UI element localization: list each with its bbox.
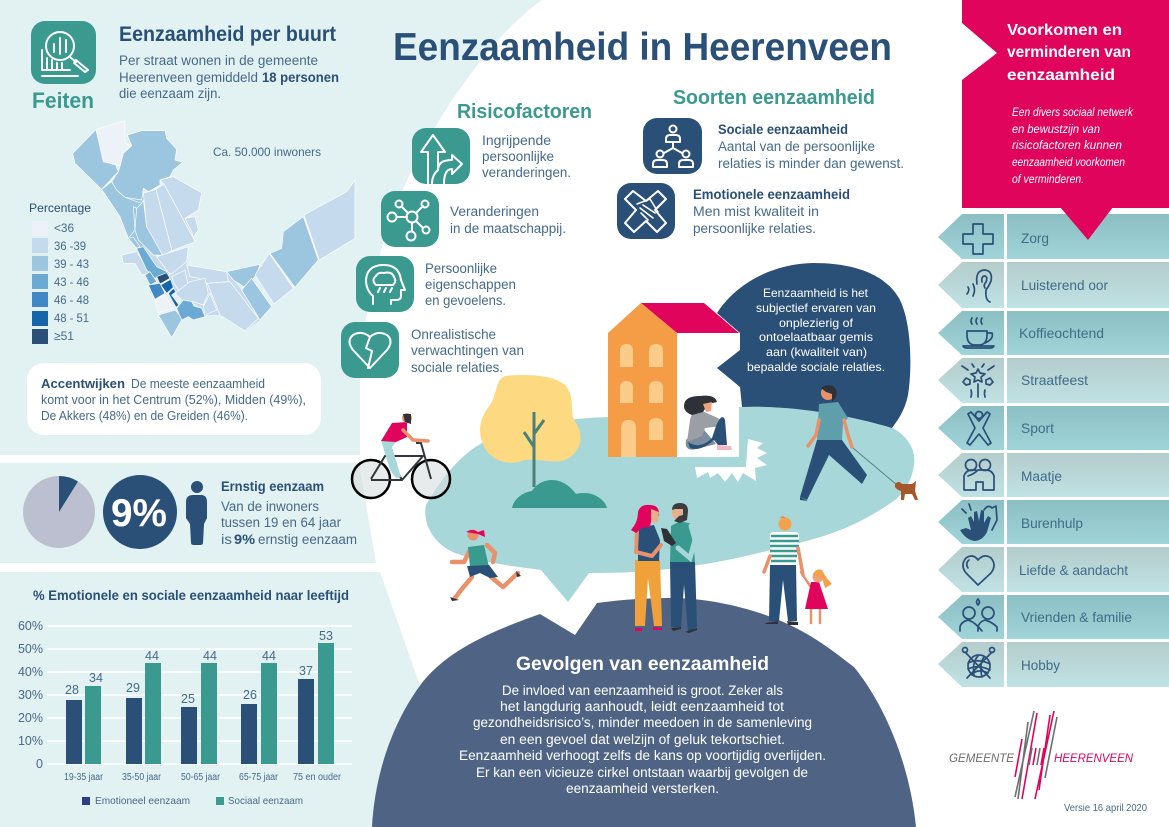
illustration: house [608, 303, 739, 457]
text: per buurt intro: 18 personen [262, 70, 339, 85]
bar chart: emotional and social loneliness by age: 44 [145, 649, 159, 663]
panel: prevention header: Voorkomen en [1007, 22, 1122, 39]
panel: prevention header: risicofactoren kunnen [1012, 138, 1122, 152]
bar chart: emotional and social loneliness by age: 34 [89, 671, 103, 685]
row: Burenhulp: Burenhulp [1021, 515, 1083, 531]
type: emotional loneliness: Men mist kwaliteit in [693, 204, 819, 219]
chart legend [82, 795, 303, 807]
risk factor 1: Ingrijpende [482, 133, 551, 148]
text: Ernstig eenzaam [221, 479, 357, 547]
risk factor 2: in de maatschappij. [450, 221, 566, 236]
callout: Accentwijken [27, 363, 321, 435]
icon: Feiten magnifier [31, 21, 96, 84]
row: Liefde en aandacht [938, 547, 1169, 592]
row: Maatje [938, 453, 1169, 497]
risk factor 2: Veranderingen [450, 204, 539, 219]
speech bubble: definition: bepaalde sociale relaties. [747, 360, 885, 374]
dome: Gevolgen van eenzaamheid: Er kan een vicieuze cirkel ontstaan waarbij gevolgen de [476, 765, 808, 780]
row: Straatfeest [938, 358, 1169, 403]
text: Ernstig eenzaam: tussen 19 en 64 jaar [221, 515, 341, 530]
bar chart: emotional and social loneliness by age: 0 [36, 757, 43, 771]
panel: facts background [0, 0, 542, 455]
bar chart: emotional and social loneliness by age: 75 en ouder [293, 772, 342, 783]
speech bubble: definition [717, 263, 910, 428]
text: per buurt intro [119, 53, 339, 101]
pie chart: 9 percent [23, 476, 95, 548]
risk factor 4: verwachtingen van [411, 343, 524, 358]
callout: Accentwijken: De meeste eenzaamheid [131, 377, 265, 391]
bar chart: emotional and social loneliness by age: 65-75 jaar [239, 772, 279, 783]
bar chart: emotional and social loneliness by age: 28 [65, 683, 79, 697]
row: Maatje: Maatje [1021, 468, 1062, 484]
text: per buurt intro: Heerenveen gemiddeld [119, 70, 258, 85]
badge: 9% [103, 475, 177, 549]
text: per buurt intro: Per straat wonen in de gemeente [119, 53, 318, 68]
bar chart: emotional and social loneliness by age [18, 588, 352, 807]
heading: per buurt: Eenzaamheid per buurt [119, 23, 336, 46]
risk factor 3 [356, 256, 516, 312]
type: social loneliness: relaties is minder dan gewenst. [718, 156, 904, 171]
heading: Risicofactoren: Risicofactoren [457, 101, 592, 123]
row: Sport [938, 406, 1169, 450]
bar chart: emotional and social loneliness by age: 10% [18, 734, 43, 748]
dome: Gevolgen van eenzaamheid: Eenzaamheid verhoogt zelfs de kans op voortijdig overlijden. [459, 748, 826, 763]
risk factor 1 [412, 128, 571, 184]
row: Koffieochtend: Koffieochtend [1019, 325, 1104, 341]
row: Hobby: Hobby [1021, 657, 1060, 673]
illustration: white house side [677, 333, 739, 457]
text: Ernstig eenzaam: 9% [234, 532, 255, 547]
text: Ernstig eenzaam: ernstig eenzaam [258, 532, 357, 547]
row: Zorg [938, 214, 1169, 259]
heading: Soorten eenzaamheid: Soorten eenzaamheid [673, 87, 875, 109]
chart title: % Emotionele en sociale eenzaamheid naar leeftijd [33, 588, 349, 603]
type: emotional loneliness: persoonlijke relaties. [693, 221, 816, 236]
speech bubble: definition: onplezierig of [779, 316, 854, 330]
bar chart: emotional and social loneliness by age: 35-50 jaar [122, 772, 162, 783]
type: social loneliness: Sociale eenzaamheid [718, 122, 848, 137]
logo: Gemeente Heerenveen [949, 711, 1133, 799]
panel: prevention header: en bewustzijn van [1012, 122, 1100, 136]
bar chart: emotional and social loneliness by age: 20% [18, 711, 43, 725]
bar chart: emotional and social loneliness by age: 44 [262, 649, 276, 663]
illustration: father and child [764, 516, 832, 625]
legend: percentage: 39 - 43 [54, 257, 89, 271]
bar chart: emotional and social loneliness by age: 40% [18, 665, 43, 679]
legend: percentage: 43 - 46 [54, 275, 89, 289]
speech bubble: definition: ontoelaatbaar gemis [759, 330, 873, 344]
map of Heerenveen neighbourhoods [73, 121, 355, 338]
pink pointer over first row [1060, 207, 1113, 240]
row: Koffieochtend [938, 311, 1169, 355]
dome: Gevolgen van eenzaamheid: gezondheidsrisico’s, minder meedoen in de samenleving [473, 715, 812, 730]
callout: Accentwijken: komt voor in het Centrum (52%), Midden (49%), [41, 393, 306, 407]
row: Vrienden en familie: Vrienden & familie [1021, 609, 1132, 625]
bar chart: emotional and social loneliness by age: 37 [299, 664, 313, 678]
dome: Gevolgen van eenzaamheid: De invloed van eenzaamheid is groot. Zeker als [502, 683, 783, 698]
panel: chart background [0, 572, 425, 827]
row: Burenhulp [938, 500, 1169, 544]
icon: dog [895, 481, 918, 500]
bar chart: emotional and social loneliness by age: 44 [203, 649, 217, 663]
badge: 9%: 9% [111, 492, 167, 535]
illustration: couple [631, 503, 697, 633]
logo: Gemeente Heerenveen: GEMEENTE [949, 751, 1015, 765]
panel: prevention header: Een divers sociaal netwerk [1012, 105, 1134, 119]
legend: percentage: 36 -39 [54, 239, 86, 253]
speech bubble: definition: aan (kwaliteit van) [766, 345, 867, 359]
row: Sport: Sport [1021, 420, 1054, 436]
type: social loneliness [643, 118, 904, 174]
panel: prevention header: eenzaamheid voorkomen [1012, 155, 1125, 169]
bar chart: emotional and social loneliness by age: 30% [18, 688, 43, 702]
speech bubble: scene background [425, 407, 914, 602]
main title: Eenzaamheid in Heerenveen [393, 26, 892, 69]
illustration: jagged shadow of the house [695, 439, 767, 482]
text: Ernstig eenzaam: is [221, 532, 232, 547]
row: Hobby [938, 642, 1169, 687]
illustration: tree [480, 375, 607, 508]
risk factor 1: veranderingen. [482, 165, 571, 180]
legend: percentage: 46 - 48 [54, 293, 89, 307]
callout: Accentwijken: De Akkers (48%) en de Greiden (46%). [41, 409, 248, 423]
text: Ernstig eenzaam: Ernstig eenzaam [221, 479, 324, 494]
dome: Gevolgen van eenzaamheid: en een gevoel dat welzijn of geluk tekortschiet. [500, 732, 785, 747]
bar chart: emotional and social loneliness by age: 29 [126, 681, 140, 695]
row: Liefde en aandacht: Liefde & aandacht [1019, 562, 1128, 578]
row: Zorg: Zorg [1021, 230, 1049, 246]
illustration: cyclist [352, 413, 450, 498]
dome: Gevolgen van eenzaamheid: Gevolgen van eenzaamheid [516, 654, 769, 675]
callout: Accentwijken: Accentwijken [41, 376, 125, 391]
risk factor 1: persoonlijke [482, 149, 554, 164]
bar chart: emotional and social loneliness by age: 25 [181, 692, 195, 706]
icon: person [186, 481, 207, 545]
row: Luisterend oor: Luisterend oor [1021, 277, 1108, 293]
risk factor 2 [381, 191, 566, 247]
legend: percentage: 48 - 51 [54, 311, 89, 325]
dome: Gevolgen van eenzaamheid: het langdurig aanhoudt, leidt eenzaamheid tot [500, 699, 784, 714]
text: inhabitants: Ca. 50.000 inwoners [213, 145, 321, 159]
row: Vrienden en familie [938, 595, 1169, 639]
speech bubble: definition: subjectief ervaren van [756, 301, 876, 315]
bar chart: emotional and social loneliness by age: 19-35 jaar [64, 772, 104, 783]
illustration: runner [450, 530, 521, 601]
bar chart: emotional and social loneliness by age: 26 [243, 688, 257, 702]
chart legend: Sociaal eenzaam [228, 795, 303, 807]
legend: percentage: Percentage [29, 201, 91, 215]
label: Feiten: Feiten [32, 88, 94, 113]
risk factor 4: Onrealistische [411, 327, 496, 342]
illustration: sad woman [684, 396, 732, 450]
legend: percentage: ≥51 [54, 329, 74, 343]
chart legend: Emotioneel eenzaam [95, 795, 190, 807]
legend: percentage: <36 [54, 221, 74, 235]
panel: prevention header [962, 0, 1169, 208]
type: emotional loneliness [617, 183, 850, 239]
panel: prevention header: verminderen van [1007, 44, 1131, 61]
risk factor 3: en gevoelens. [425, 293, 506, 308]
panel: prevention header: eenzaamheid [1007, 67, 1115, 84]
logo: Gemeente Heerenveen: HEERENVEEN [1054, 751, 1133, 765]
panel: severe loneliness background [0, 463, 376, 563]
illustration: walking man with dog [800, 385, 918, 501]
dome: Gevolgen van eenzaamheid [372, 598, 916, 827]
risk factor 4: sociale relaties. [411, 360, 503, 375]
legend: percentage [29, 201, 91, 344]
text: version: Versie 16 april 2020 [1064, 802, 1147, 814]
panel: prevention header: of verminderen. [1012, 172, 1084, 186]
bar chart: emotional and social loneliness by age: 50-65 jaar [181, 772, 221, 783]
risk factor 4 [341, 322, 524, 378]
dome: Gevolgen van eenzaamheid: eenzaamheid versterken. [566, 781, 719, 796]
speech bubble: definition: Eenzaamheid is het [763, 286, 869, 300]
type: emotional loneliness: Emotionele eenzaamheid [693, 187, 850, 202]
risk factor 3: Persoonlijke [425, 261, 497, 276]
bar chart: emotional and social loneliness by age: 50% [18, 642, 43, 656]
row: Luisterend oor [938, 262, 1169, 308]
type: social loneliness: Aantal van de persoonlijke [718, 139, 875, 154]
risk factor 3: eigenschappen [425, 277, 516, 292]
bar chart: emotional and social loneliness by age: 60% [18, 619, 43, 633]
text: per buurt intro: die eenzaam zijn. [119, 86, 221, 101]
text: Ernstig eenzaam: Van de inwoners [221, 499, 319, 514]
bar chart: emotional and social loneliness by age: 53 [319, 629, 333, 643]
row: Straatfeest: Straatfeest [1021, 372, 1088, 388]
